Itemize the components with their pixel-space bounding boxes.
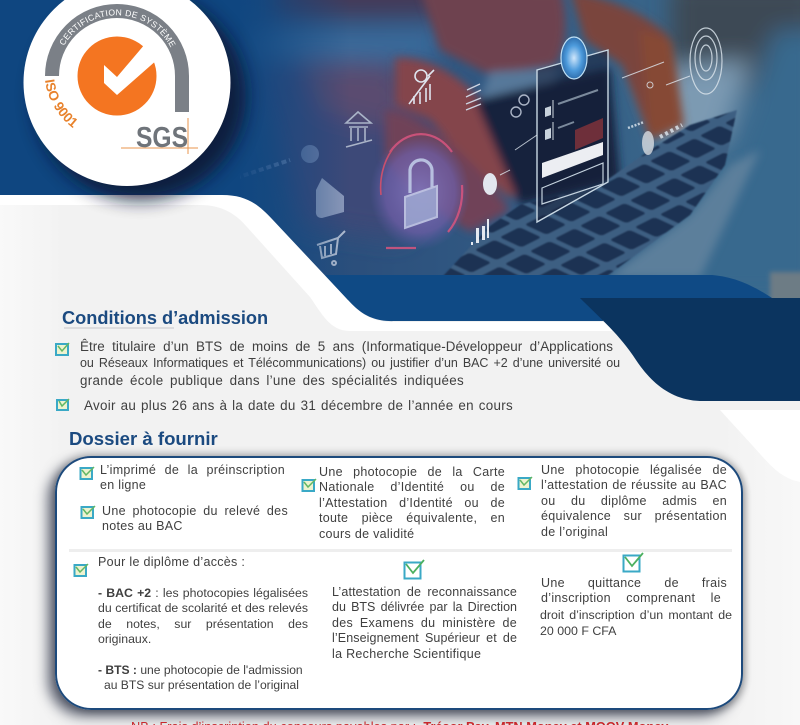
text: condition 2: Avoir au plus 26 ans à la date du 31 décembre de l’année en cours — [84, 398, 513, 413]
text: relevé de notes — [102, 504, 288, 533]
text: carte d'identité: Nationale d’Identité ou de — [319, 480, 505, 494]
logo shadow — [34, 0, 246, 200]
text: attestation de reconnaissance: la Recherche Scientifique — [332, 647, 481, 661]
text: BAC +2: du certificat de scolarité et des relevés — [98, 601, 308, 615]
logo check mark — [104, 44, 158, 95]
text: diplôme d'accès: Pour le diplôme d’accès : — [98, 555, 245, 569]
icon: check 4 — [518, 476, 532, 490]
text: imprimé: L’imprimé de la préinscription — [100, 463, 285, 477]
icon: connection lines — [500, 62, 690, 175]
white corner shape — [720, 410, 800, 482]
blue ribbon under photo — [325, 275, 772, 321]
text: condition 1: Être titulaire d’un BTS de moins de 5 ans (Informatique-Développeur d’Applications — [80, 338, 613, 354]
text: BAC +2: de notes, sur présentation des — [98, 617, 308, 631]
navy ribbon — [580, 298, 800, 401]
icon: shopping cart — [317, 231, 345, 265]
icon: login panel — [537, 37, 608, 222]
heading: conditions d'admission: Conditions d’admission — [62, 308, 268, 328]
text: BTS: au BTS sur présentation de l’original — [104, 678, 299, 692]
text: carte d'identité: toute pièce équivalente, en — [319, 511, 505, 525]
icon: bars — [471, 219, 489, 245]
text: quittance: 20 000 F CFA — [540, 624, 616, 638]
text: carte d'identité: Une photocopie de la Carte — [319, 465, 505, 479]
text: attestation de reconnaissance: L’attestation de reconnaissance — [332, 585, 517, 599]
text: attestation de réussite: de l’original — [541, 525, 608, 539]
grey panel — [0, 205, 800, 725]
text: attestation de reconnaissance: l’Enseignement Supérieur et de — [332, 631, 517, 645]
text: condition 1 — [80, 338, 620, 388]
icon: check 3 — [302, 478, 316, 492]
logo: ISO 9001 SGS certification — [24, 0, 230, 186]
panel: dossier card — [55, 456, 743, 710]
text: carte d'identité — [319, 465, 505, 541]
text: attestation de réussite: équivalence sur présentation — [541, 509, 727, 523]
check icon: condition 2 — [57, 399, 69, 410]
heading underline — [64, 327, 174, 329]
text: attestation de reconnaissance — [332, 585, 517, 661]
icon: padlock with pink ring — [370, 134, 470, 250]
icon: bank — [346, 112, 372, 147]
icon: check 5 — [74, 564, 88, 577]
logo text: certification: CERTIFICATION DE SYSTÈME — [60, 9, 176, 48]
text: BTS — [98, 663, 303, 692]
white swoosh — [0, 195, 612, 420]
icon: pie chart — [483, 173, 497, 195]
logo orange disc — [78, 36, 156, 116]
text: quittance: droit d’inscription d’un montant de — [540, 608, 732, 622]
logo text: ISO 9001: ISO 9001 — [45, 80, 77, 128]
icon: round emblem — [690, 28, 722, 94]
icon: check 2 — [80, 506, 96, 519]
header blue band — [0, 0, 240, 195]
text: carte d'identité: cours de validité — [319, 527, 414, 541]
text: imprimé: en ligne — [100, 478, 146, 492]
heading: dossier à fournir: Dossier à fournir — [69, 428, 218, 449]
text: attestation de réussite: l’attestation de réussite au BAC — [541, 478, 727, 492]
logo text: SGS: SGS — [136, 122, 188, 154]
text: quittance: d’inscription comprenant le — [541, 591, 721, 605]
text: quittance — [540, 576, 732, 638]
icon: check large 7 — [622, 552, 644, 572]
icon: wallet — [316, 178, 344, 218]
text: relevé de notes: Une photocopie du relevé des — [102, 504, 288, 518]
text: attestation de réussite — [541, 463, 727, 539]
text: BAC +2 — [98, 586, 308, 646]
icon: check large 6 — [404, 559, 425, 580]
icon: arrows and bulb — [236, 145, 319, 178]
text: attestation de reconnaissance: du BTS délivrée par la Direction — [332, 600, 517, 614]
text: condition 1: grande école publique dans l’une des spécialités indiquées — [80, 372, 464, 388]
text: attestation de réussite: ou du diplôme admis en — [541, 494, 727, 508]
text: attestation de réussite: Une photocopie légalisée de — [541, 463, 727, 477]
text: attestation de reconnaissance: des Examens du ministère de — [332, 616, 517, 630]
icon: document stack — [466, 84, 481, 110]
icon: gears — [511, 95, 529, 117]
text: BAC +2: - BAC +2 : les photocopies légalisées — [98, 586, 308, 600]
text: quittance: Une quittance de frais — [541, 576, 727, 590]
check icon: condition 1 — [56, 343, 69, 355]
text: imprimé — [100, 463, 285, 492]
icon: growth chart — [409, 70, 434, 104]
text: relevé de notes: notes au BAC — [102, 519, 183, 533]
text: carte d'identité: l’Attestation d’Identité ou de — [319, 496, 505, 510]
text: condition 1: ou Réseaux Informatiques et Télécommunications) ou justifier d’un BAC +2 d’une université ou — [80, 356, 620, 370]
icon: check 1 — [80, 466, 94, 480]
photo: hands on laptop keyboard — [0, 0, 800, 302]
text: BTS: - BTS : une photocopie de l'admission — [98, 663, 303, 677]
text: BAC +2: originaux. — [98, 632, 151, 646]
